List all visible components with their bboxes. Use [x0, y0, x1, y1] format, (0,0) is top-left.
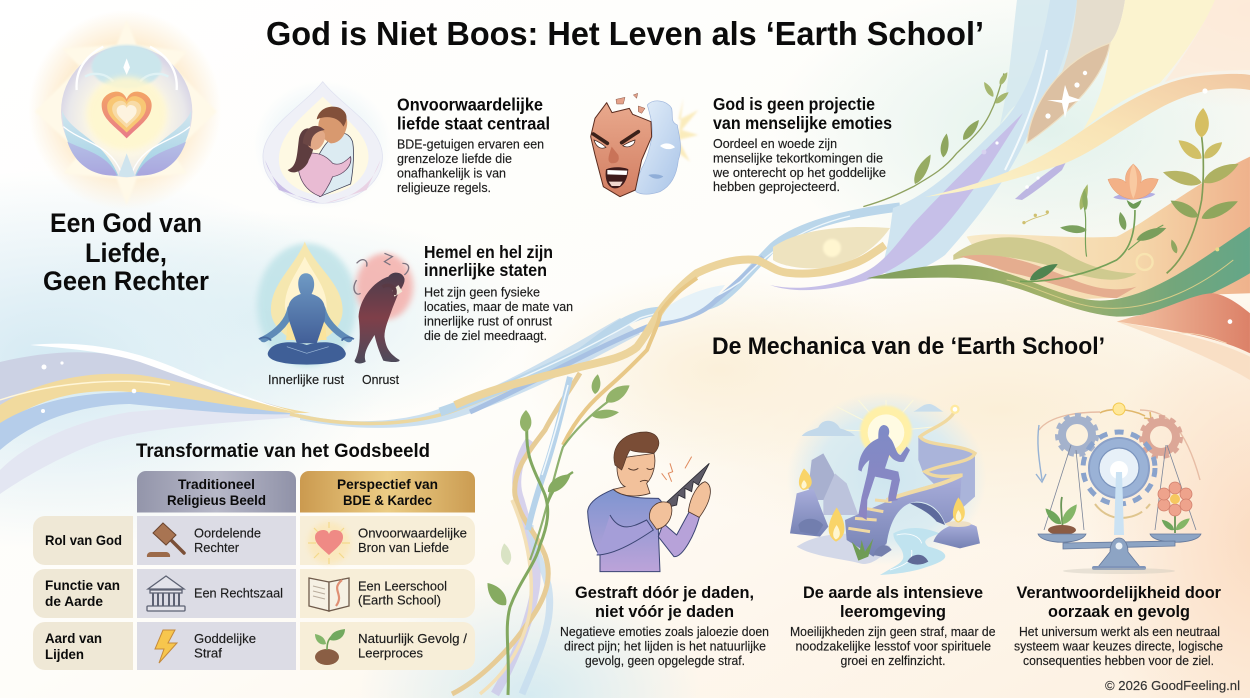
- right landscape bands and plants: [863, 71, 1250, 380]
- text block: heaven and hell: [424, 242, 573, 343]
- heading: God of love: [43, 208, 209, 296]
- table heading: Transformatie van het Godsbeeld: [136, 440, 430, 462]
- panel: comparison table: [33, 440, 475, 670]
- label: responsibility heading: Verantwoordelijkheid door: [1016, 583, 1221, 602]
- icon: lightning bolt: [155, 630, 177, 663]
- label: unrest: Onrust: [362, 373, 400, 387]
- label: inner peace: Innerlijke rust: [268, 373, 345, 387]
- flowing ribbons: centre twist: [290, 207, 900, 445]
- panel: responsibility: oorzaak en gevolg: [1048, 602, 1190, 621]
- row: nature of suffering: Straf: [194, 646, 222, 660]
- plant: stems: [1020, 108, 1241, 284]
- icon: gavel: [147, 523, 184, 557]
- panel: responsibility: [1014, 403, 1223, 668]
- icon: embracing couple: [253, 80, 392, 210]
- icon: inner peace and unrest figures: [257, 242, 413, 387]
- row: function of Earth: Functie van: [45, 577, 120, 593]
- text block: no projection: menselijke tekortkomingen die: [713, 152, 883, 166]
- panel: earth as learning environment: leeromgeving: [840, 602, 946, 621]
- icon: sprout: [315, 629, 345, 665]
- row: nature of suffering: Goddelijke: [194, 631, 256, 646]
- row: function of Earth: (Earth School): [358, 592, 441, 608]
- text block: heaven and hell: innerlijke staten: [424, 260, 547, 280]
- row: role of God: Rechter: [194, 540, 240, 555]
- copyright: © 2026 GoodFeeling.nl: [1105, 679, 1240, 693]
- column header: BDE and Kardec: Perspectief van: [337, 476, 438, 492]
- column header: traditional: Religieus Beeld: [167, 492, 266, 508]
- text block: heaven and hell: locaties, maar de mate van: [424, 300, 573, 314]
- text: punished body: Negatieve emoties zoals jaloezie doen: [560, 625, 769, 639]
- row: nature of suffering: Lijden: [45, 646, 84, 662]
- text block: unconditional love: grenzeloze liefde die: [397, 152, 512, 166]
- text: punished body: direct pijn; het lijden is het natuurlijke: [564, 640, 766, 654]
- panel: earth as learning environment: [787, 392, 996, 668]
- icon: man holding thorn: [588, 432, 710, 572]
- label: punished heading: Gestraft dóór je daden,: [575, 583, 754, 602]
- flowing ribbons: upper right: [770, 0, 1250, 290]
- row: role of God: [33, 516, 475, 565]
- text: responsibility body: systeem waar keuzes directe, logische: [1014, 640, 1223, 654]
- text block: heaven and hell: Hemel en hel zijn: [424, 242, 553, 262]
- text block: no projection: hebben geprojecteerd.: [713, 180, 840, 194]
- text: earth body: Moeilijkheden zijn geen straf, maar de: [790, 625, 996, 639]
- row: nature of suffering: Leerproces: [358, 646, 423, 660]
- row: role of God: Rol van God: [45, 532, 122, 548]
- heading: God of love: Liefde,: [85, 238, 167, 268]
- text block: no projection: van menselijke emoties: [713, 113, 892, 133]
- row: nature of suffering: [33, 622, 475, 670]
- icon: glowing heart: [308, 522, 350, 564]
- icon: courthouse: [147, 576, 185, 611]
- row: role of God: Oordelende: [194, 526, 261, 540]
- text block: heaven and hell: Het zijn geen fysieke: [424, 286, 540, 300]
- flowing ribbons: left: [0, 344, 310, 494]
- text block: unconditional love: liefde staat centraal: [397, 114, 550, 134]
- column header: BDE and Kardec: [300, 471, 475, 512]
- text block: unconditional love: BDE-getuigen ervaren een: [397, 138, 544, 152]
- row: function of Earth: de Aarde: [45, 593, 103, 609]
- text block: no projection: God is geen projectie: [713, 94, 875, 114]
- text block: unconditional love: religieuze regels.: [397, 181, 491, 195]
- row: function of Earth: [33, 569, 475, 618]
- icon: climbing figure on path: [787, 392, 987, 575]
- text: earth body: noodzakelijke lesstof voor spirituele: [796, 640, 991, 654]
- text: responsibility body: consequenties hebben voor de ziel.: [1023, 654, 1214, 668]
- emblem: heart in glowing sphere: [28, 10, 222, 210]
- text block: no projection: Oordeel en woede zijn: [713, 137, 837, 151]
- text block: no projection: [712, 94, 892, 194]
- row: role of God: Onvoorwaardelijke: [358, 526, 467, 540]
- text block: unconditional love: Onvoorwaardelijke: [397, 94, 543, 114]
- vine ribbon: [452, 373, 633, 695]
- text block: no projection: we onterecht op het goddelijke: [712, 166, 886, 180]
- text block: unconditional love: onafhankelijk is van: [397, 166, 506, 180]
- flower: [1108, 164, 1158, 209]
- icon: angry face and mask: [591, 93, 698, 197]
- text block: unconditional love: [397, 94, 550, 195]
- label: earth heading: De aarde als intensieve: [803, 583, 983, 602]
- heading: God of love: Een God van: [50, 208, 202, 238]
- text: punished body: gevolg, geen opgelegde straf.: [585, 654, 745, 668]
- panel: punished by deeds: niet vóór je daden: [595, 602, 734, 621]
- title: God is Niet Boos: Het Leven als ‘Earth School’: [266, 15, 984, 52]
- column header: BDE and Kardec: BDE & Kardec: [343, 492, 432, 508]
- row: nature of suffering: Aard van: [45, 630, 102, 646]
- green vine: [482, 374, 633, 695]
- icon: gears and balance: [1036, 403, 1201, 574]
- icon: open book: [309, 578, 349, 611]
- column header: traditional: [137, 471, 296, 512]
- text: punished body: [560, 625, 769, 668]
- text block: heaven and hell: die de ziel meedraagt.: [424, 329, 547, 343]
- upper olive vine: [863, 71, 1010, 207]
- row: role of God: Bron van Liefde: [358, 540, 449, 555]
- row: function of Earth: Een Rechtszaal: [194, 586, 283, 600]
- text: responsibility body: Het universum werkt als een neutraal: [1019, 625, 1220, 639]
- column header: traditional: Traditioneel: [178, 476, 255, 492]
- text: earth body: [790, 625, 996, 668]
- icon: layered heart: [102, 92, 152, 138]
- panel: punished by deeds: [560, 432, 769, 668]
- row: nature of suffering: Natuurlijk Gevolg /: [358, 631, 467, 646]
- text: responsibility body: [1014, 625, 1223, 668]
- text block: heaven and hell: innerlijke rust of onrust: [424, 314, 552, 328]
- heading: mechanics of Earth School: De Mechanica van de ‘Earth School’: [712, 333, 1105, 360]
- text: earth body: groei en zelfinzicht.: [840, 654, 946, 668]
- heading: God of love: Geen Rechter: [43, 266, 209, 296]
- eye lens: [773, 227, 890, 268]
- row: function of Earth: Een Leerschool: [358, 578, 447, 594]
